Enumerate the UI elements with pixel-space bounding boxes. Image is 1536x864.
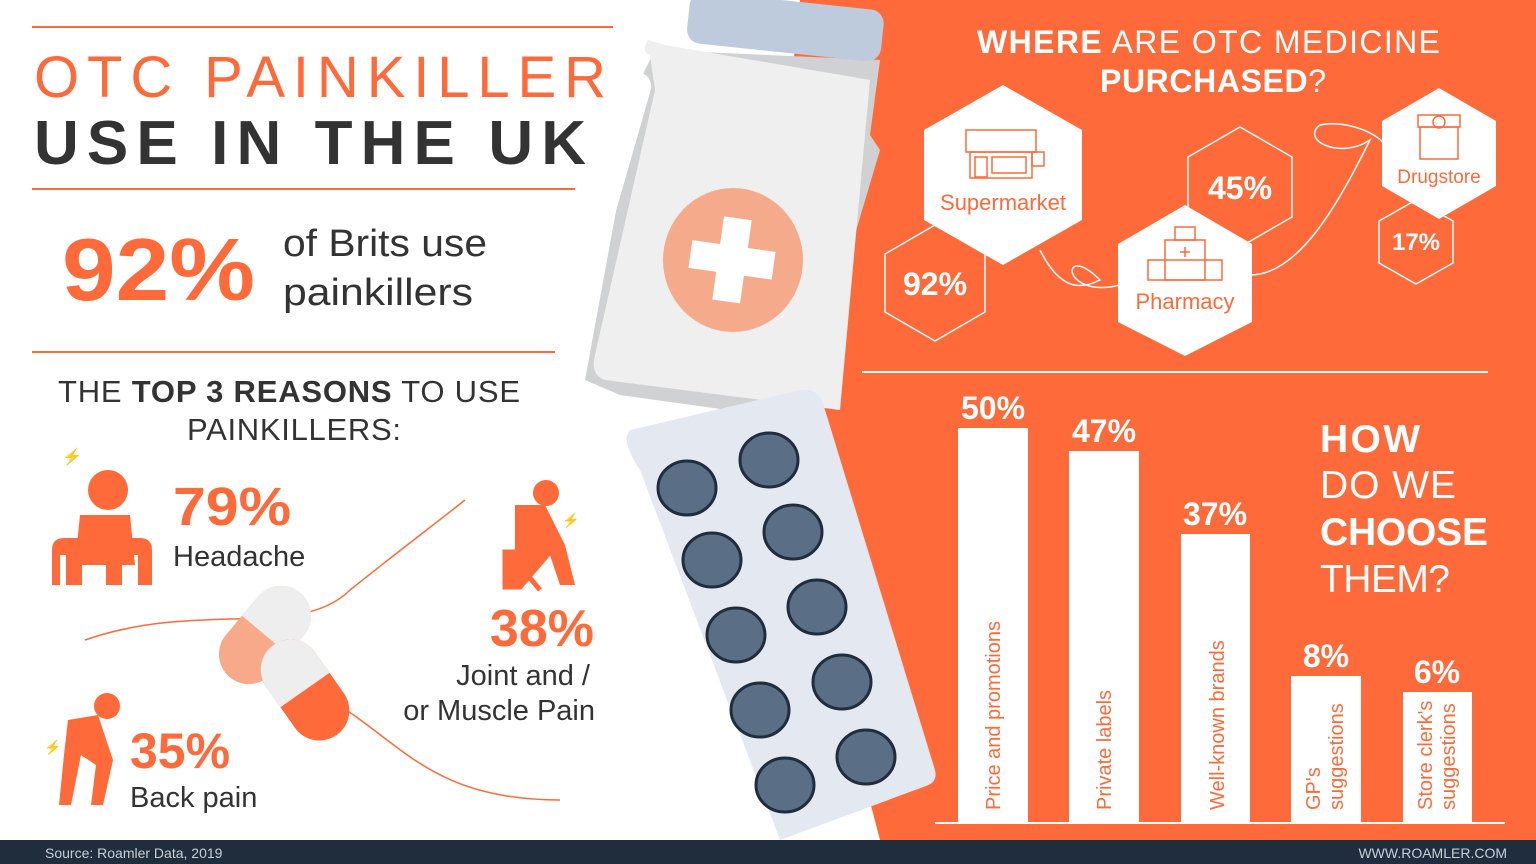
hexagon: drugstore: Drugstore xyxy=(1397,167,1481,188)
title: USE IN THE UK xyxy=(34,109,586,178)
reason: back pain: Back pain xyxy=(130,782,257,814)
icon: capsules xyxy=(207,574,361,752)
heading: how do we choose them: HOW xyxy=(1320,418,1420,461)
bar chart: how do we choose: Well-known brands xyxy=(1207,640,1229,810)
hexagon: 92%: 92% xyxy=(903,266,967,302)
stat: 92% of Brits: painkillers xyxy=(283,272,473,314)
reason: back pain: 35% xyxy=(130,723,230,779)
icon: pill bottle xyxy=(584,0,885,420)
heading: how do we choose them xyxy=(1320,418,1488,601)
bar chart: how do we choose: 47% xyxy=(1072,413,1136,449)
bar chart: how do we choose: 8% xyxy=(1303,638,1349,674)
hexagon: pharmacy: Pharmacy xyxy=(1135,289,1235,314)
orange background panel xyxy=(760,0,1536,840)
bar chart: how do we choose xyxy=(935,390,1505,823)
hexagon: pharmacy xyxy=(1118,205,1252,356)
footer: Source: Roamler Data, 2019 xyxy=(45,845,223,861)
hexagon: drugstore xyxy=(1382,88,1496,219)
title xyxy=(32,27,613,189)
footer: WWW.ROAMLER.COM xyxy=(1358,845,1507,861)
reason: joint/muscle pain: ⚡ xyxy=(562,512,579,529)
connector curves xyxy=(1040,124,1385,287)
footer xyxy=(0,840,1536,864)
decorative curves xyxy=(85,500,465,640)
reason: back pain xyxy=(44,693,257,814)
reason: joint/muscle pain xyxy=(403,480,595,727)
bar chart: how do we choose: Price and promotions xyxy=(983,621,1005,810)
hexagon: 92% xyxy=(885,225,985,341)
bar chart: how do we choose: GP's xyxy=(1303,767,1325,810)
heading: how do we choose them: CHOOSE xyxy=(1320,511,1488,554)
bar chart: how do we choose: suggestions xyxy=(1438,703,1460,810)
stat: 92% of Brits xyxy=(32,220,555,352)
heading: top 3 reasons xyxy=(58,374,520,447)
stat: 92% of Brits: of Brits use xyxy=(283,223,487,265)
hexagon: supermarket: Supermarket xyxy=(940,190,1066,215)
reason: headache: ⚡ xyxy=(62,447,82,466)
heading: where purchased: WHERE ARE OTC MEDICINE xyxy=(977,24,1440,60)
icon: blister pack xyxy=(627,390,936,840)
heading: where purchased xyxy=(977,24,1440,99)
reason: headache: Headache xyxy=(173,541,305,573)
hexagon: supermarket xyxy=(924,85,1082,265)
hexagon: 17% xyxy=(1379,200,1453,284)
heading: how do we choose them: THEM? xyxy=(1320,558,1450,601)
hexagon: 45%: 45% xyxy=(1208,170,1272,206)
hexagon: 17%: 17% xyxy=(1392,229,1440,256)
bar chart: how do we choose: 50% xyxy=(961,390,1025,426)
title: OTC PAINKILLER xyxy=(34,45,606,110)
reason: joint/muscle pain: 38% xyxy=(490,600,594,658)
bar chart: how do we choose: suggestions xyxy=(1326,703,1348,810)
reason: headache xyxy=(52,447,305,585)
stat: 92% of Brits: 92% xyxy=(62,220,255,319)
heading: where purchased: PURCHASED? xyxy=(1100,63,1326,99)
bar chart: how do we choose: Store clerk's xyxy=(1415,701,1437,810)
bar chart: how do we choose: 37% xyxy=(1183,496,1247,532)
heading: how do we choose them: DO WE xyxy=(1320,464,1456,507)
bar chart: how do we choose: 6% xyxy=(1414,654,1460,690)
heading: top 3 reasons: THE TOP 3 REASONS TO USE xyxy=(58,374,520,409)
reason: joint/muscle pain: or Muscle Pain xyxy=(403,695,595,727)
reason: headache: 79% xyxy=(173,477,291,537)
hexagon: 45% xyxy=(1188,127,1292,247)
heading: top 3 reasons: PAINKILLERS: xyxy=(187,412,401,447)
reason: joint/muscle pain: Joint and / xyxy=(456,660,591,692)
reason: back pain: ⚡ xyxy=(44,739,61,756)
bar chart: how do we choose: Private labels xyxy=(1094,690,1116,810)
